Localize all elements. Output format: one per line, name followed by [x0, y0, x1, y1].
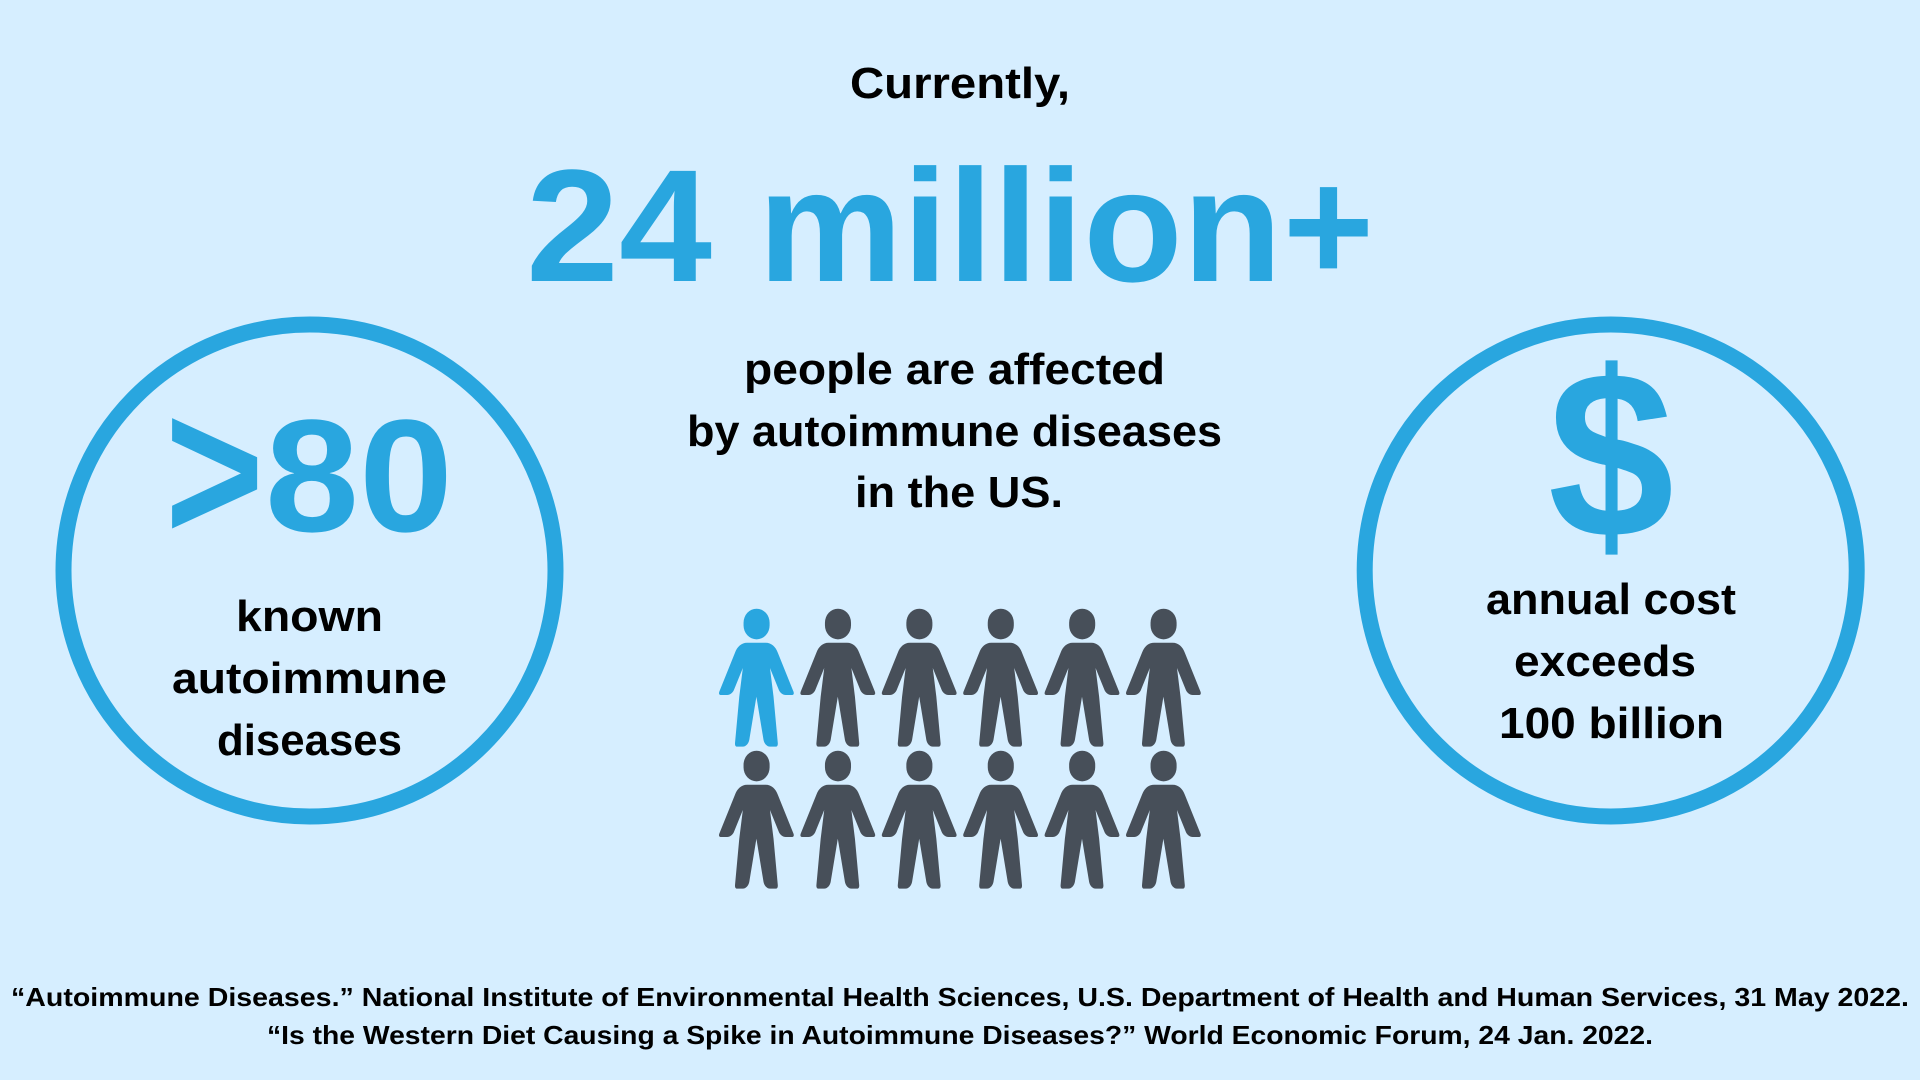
icon: person: [882, 609, 957, 747]
heading: Currently: Currently,: [850, 59, 1070, 108]
footer: sources: “Autoimmune Diseases.” National Institute of Environmental Health Sciences, U.S. Department of Health and Human Services, 31 May 2022.: [11, 982, 1909, 1012]
icon: person: [800, 751, 875, 889]
text block: people affected: [687, 345, 1222, 517]
stat: more than 80: 80: [265, 386, 453, 565]
ring: left circle: [64, 324, 556, 816]
headline stat: 24 million+: [526, 136, 1374, 315]
label: known autoimmune diseases: [172, 592, 447, 765]
footer: sources: “Is the Western Diet Causing a Spike in Autoimmune Diseases?” World Economic Forum, 24 Jan. 2022.: [267, 1020, 1653, 1050]
label: annual cost exceeds 100 billion: exceeds: [1514, 637, 1696, 686]
panel: known autoimmune diseases: [64, 324, 556, 816]
headline stat: 24 million+: +: [1283, 136, 1374, 315]
text block: people affected: by autoimmune diseases: [687, 407, 1222, 456]
stat: more than 80: >: [165, 356, 264, 584]
text block: people affected: people are affected: [744, 345, 1165, 394]
headline stat: 24 million+: million: [758, 136, 1282, 315]
headline stat: 24 million+: 24: [526, 136, 712, 315]
label: annual cost exceeds 100 billion: 100 billion: [1499, 699, 1724, 748]
ring: right circle: [1365, 324, 1857, 816]
icon: person: [963, 751, 1038, 889]
icon: person: [882, 751, 957, 889]
stat: more than 80: [165, 356, 453, 584]
footer: sources: [11, 982, 1909, 1050]
label: known autoimmune diseases: known: [236, 592, 383, 641]
icon: person: [800, 609, 875, 747]
pictogram: 1 in 12 people: [719, 609, 1201, 889]
text block: people affected: in the US.: [855, 468, 1063, 517]
label: annual cost exceeds 100 billion: annual cost: [1486, 575, 1736, 624]
icon: person highlighted: [719, 609, 794, 747]
icon: person: [1045, 609, 1119, 747]
label: annual cost exceeds 100 billion: [1486, 575, 1736, 748]
icon: person: [1126, 751, 1201, 889]
label: known autoimmune diseases: autoimmune: [172, 654, 447, 703]
icon: person: [1045, 751, 1119, 889]
icon: dollar sign: $: [1548, 323, 1674, 588]
icon: person: [1126, 609, 1201, 747]
icon: person: [963, 609, 1038, 747]
panel: annual cost: [1365, 323, 1857, 816]
label: known autoimmune diseases: diseases: [217, 716, 402, 765]
icon: person: [719, 751, 794, 889]
